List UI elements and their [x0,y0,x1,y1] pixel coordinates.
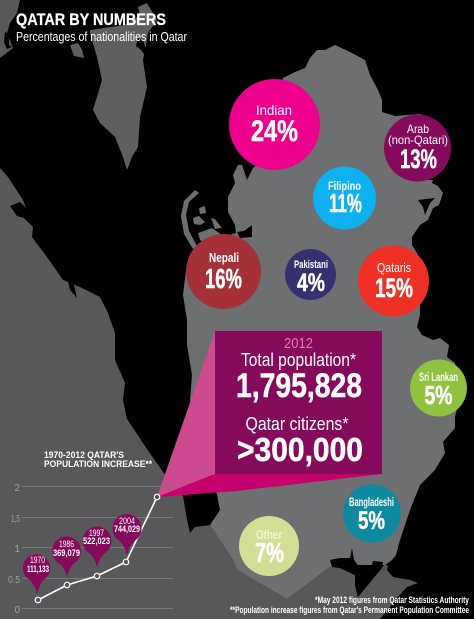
bubble: Qataris [358,246,429,316]
y axis labels: 2 [14,483,20,494]
bubble: Sri Lankan [410,360,467,416]
bubble: Filipino: 11% [329,188,362,218]
bubble: Other: Other [256,527,282,542]
bubble: Filipino [313,166,376,230]
callout: 2012 population panel: 1,795,828 [236,367,362,405]
line chart: population increase [8,483,173,616]
map: Qatar coastal inlets [237,198,435,597]
pin: 1970: 1970 [30,555,45,566]
bubble: Nepali: Nepali [209,251,239,265]
bubble: Arab non-Qatari: Arab [407,122,429,136]
pin: 1970 [23,554,50,594]
chart title: 1970-2012 QATAR'S [44,450,124,461]
pin: 1997: 1997 [89,528,104,539]
data points [35,494,160,603]
pin: 2004 [112,514,142,555]
callout: 2012 population panel: Qatar citizens* [246,414,348,434]
title: QATAR BY NUMBERS [16,10,166,29]
chart title: POPULATION INCREASE** [44,459,152,470]
subtitle: Percentages of nationalities in Qatar [16,29,188,44]
bubble: Arab non-Qatari: (non-Qatari) [388,133,448,147]
pin: 1997: 522,023 [83,536,110,546]
bubble: Filipino: Filipino [328,179,361,193]
bubble: Pakistani: 4% [297,269,325,297]
y axis labels [8,483,20,616]
bubble: Pakistani: Pakistani [294,259,328,271]
callout: 2012 population panel [215,331,382,474]
callout: 2012 population panel: >300,000 [237,431,363,468]
y axis labels: 1,5 [11,514,20,525]
bubble: Indian: Indian [256,102,292,118]
y axis labels: 0.5 [8,575,20,586]
pin: 2004: 744,029 [114,524,140,534]
pin: 1970: 111,133 [27,564,49,574]
callout: 2012 population panel: 2012 [284,335,313,352]
bubble: Pakistani [285,249,336,300]
chart title [44,450,152,470]
bubble: Indian [229,79,320,170]
callout: connector wedges [157,331,382,497]
bubble: Nepali: 16% [205,263,242,294]
bubble: Sri Lankan: 5% [424,380,452,410]
footnotes [230,595,469,615]
pin: 2004: 2004 [119,516,135,527]
pin: 1986: 1986 [59,539,74,550]
y axis labels: 0 [14,605,20,616]
bubble: Arab non-Qatari [384,114,451,182]
map: Qatar peninsula [183,45,460,599]
pin: 1997 [82,526,112,567]
callout: 2012 population panel: Total population* [241,350,356,370]
bubble: Other [239,516,299,576]
pin: 1986 [52,536,81,577]
bubble: Other: 7% [255,537,284,568]
bubble: Qataris: Qataris [377,260,411,275]
bubble: Bangladeshi: Bangladeshi [349,497,394,509]
y axis labels: 1 [14,544,20,555]
bubble: Bangladeshi: 5% [358,507,385,535]
bubble: Qataris: 15% [375,273,413,303]
bubble: Nepali [186,234,261,309]
bubble: Bangladeshi [343,484,401,542]
bubble: Arab non-Qatari: 13% [400,144,437,174]
pin: 1986: 369,079 [53,548,80,558]
bubble: Indian: 24% [251,115,298,148]
data line [38,497,157,600]
